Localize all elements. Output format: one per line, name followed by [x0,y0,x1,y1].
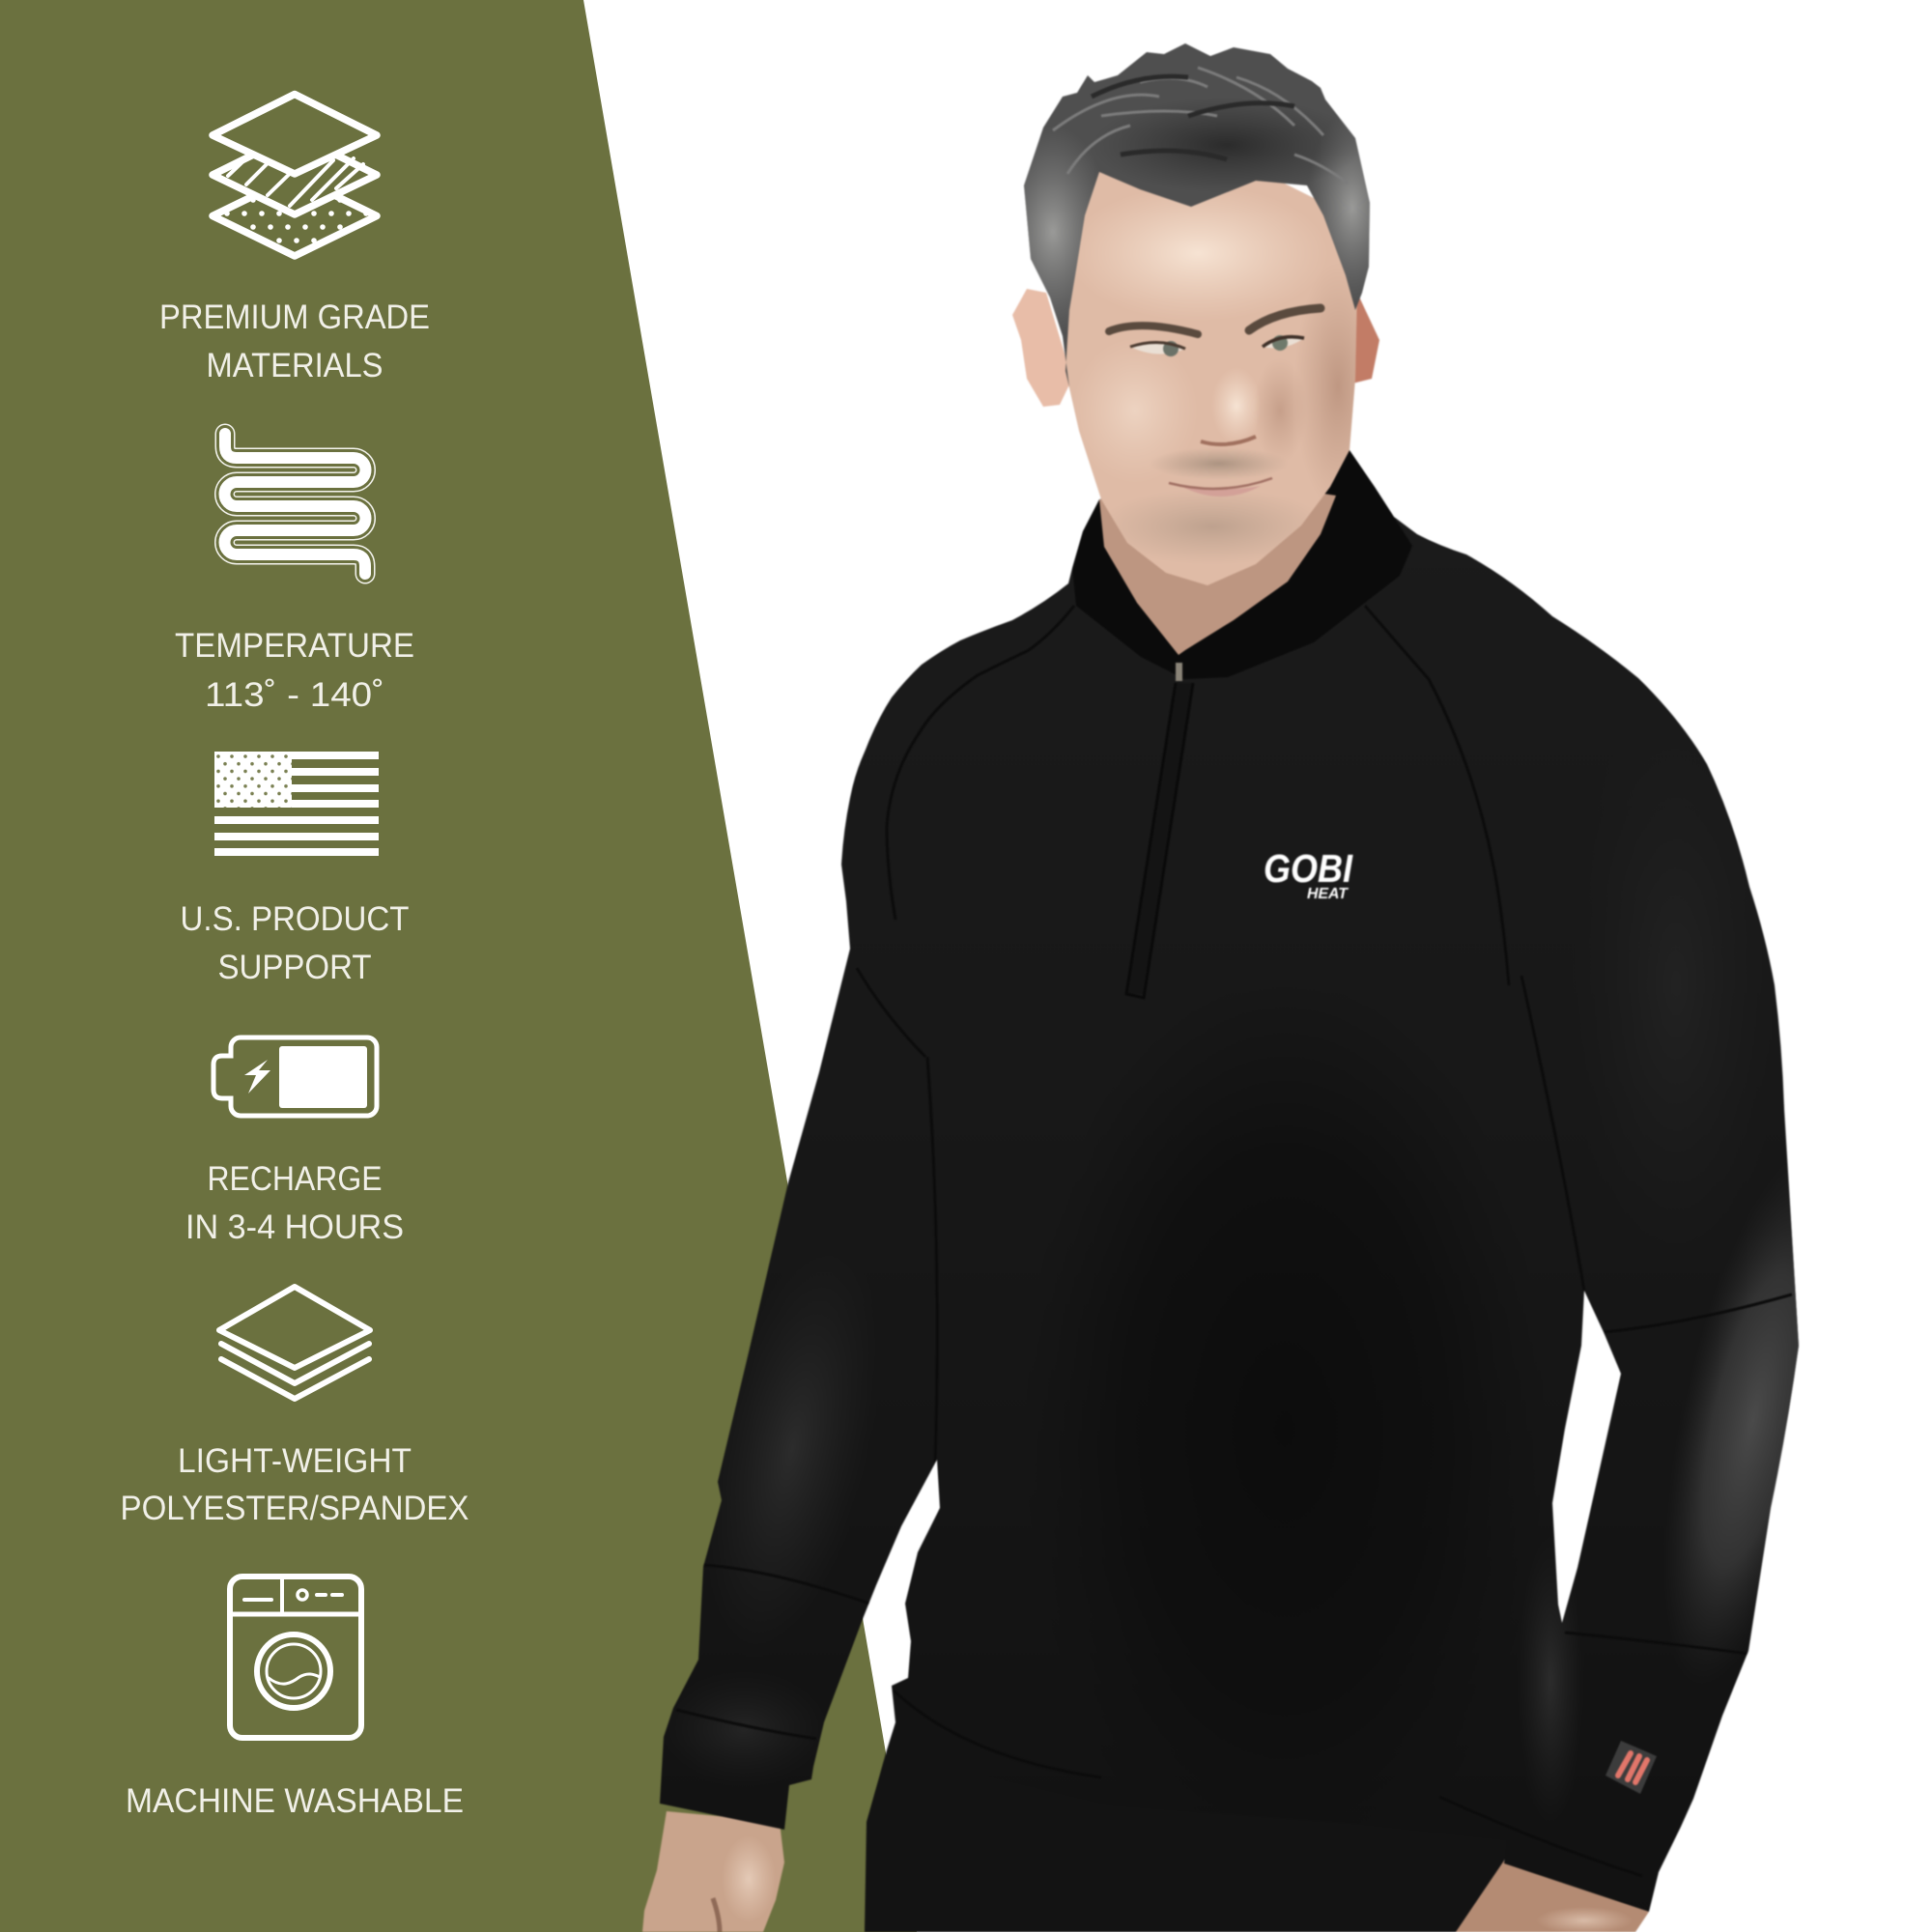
right hand [1456,1861,1649,1932]
label: recharge time [185,1160,404,1246]
label: premium grade materials: PREMIUM GRADE [159,298,430,336]
feature: machine washable [126,1577,464,1820]
trousers [865,1753,1517,1932]
label: machine washable: MACHINE WASHABLE [126,1782,464,1820]
label: recharge time: RECHARGE [207,1160,383,1198]
label: fabric composition: LIGHT-WEIGHT [178,1442,412,1480]
icon: material layers [213,95,377,256]
hair [1023,43,1371,386]
left hand [642,1811,784,1932]
ears [1012,289,1379,407]
icon: fabric stack [219,1287,370,1399]
black long sleeve shirt [659,450,1800,1913]
icon: washing machine [230,1577,361,1738]
cuff heat button [1605,1741,1657,1794]
feature: U.S. product support [180,752,410,986]
neck [1099,483,1336,655]
eyebrows [1109,326,1198,334]
chest logo: Gobi Heat: HEAT [1307,886,1349,902]
label: premium grade materials [159,298,430,384]
label: fabric composition: POLYESTER/SPANDEX [120,1490,469,1527]
label: U.S. product support [180,900,410,986]
feature: light-weight fabric [120,1287,469,1527]
collar [1072,450,1412,679]
feature: temperature [175,434,414,714]
icon: american flag [214,752,379,856]
label: temperature range: 113˚ - 140˚ [205,676,384,714]
nose and mouth [1201,437,1256,444]
model photo: man in black quarter-zip [638,29,1881,1932]
garment seams [677,606,1793,1739]
label: temperature range [175,627,414,714]
label: premium grade materials: MATERIALS [207,347,383,384]
panel: green feature panel [0,0,917,1932]
icon: battery [213,1037,377,1116]
label: recharge time: IN 3-4 HOURS [185,1208,404,1246]
chest logo: Gobi Heat: GOBI [1264,846,1353,891]
zipper placket [1126,663,1193,998]
label: temperature range: TEMPERATURE [175,627,414,665]
eyes [1132,344,1182,355]
white gap between torso and right arm [1552,1291,1621,1623]
label: U.S. product support: U.S. PRODUCT [180,900,410,938]
icon: heating coil [224,434,365,574]
label: fabric composition [120,1442,469,1527]
label: U.S. product support: SUPPORT [218,949,371,986]
feature: recharge [185,1037,404,1246]
feature: premium grade materials [159,95,430,384]
face [1065,172,1357,585]
